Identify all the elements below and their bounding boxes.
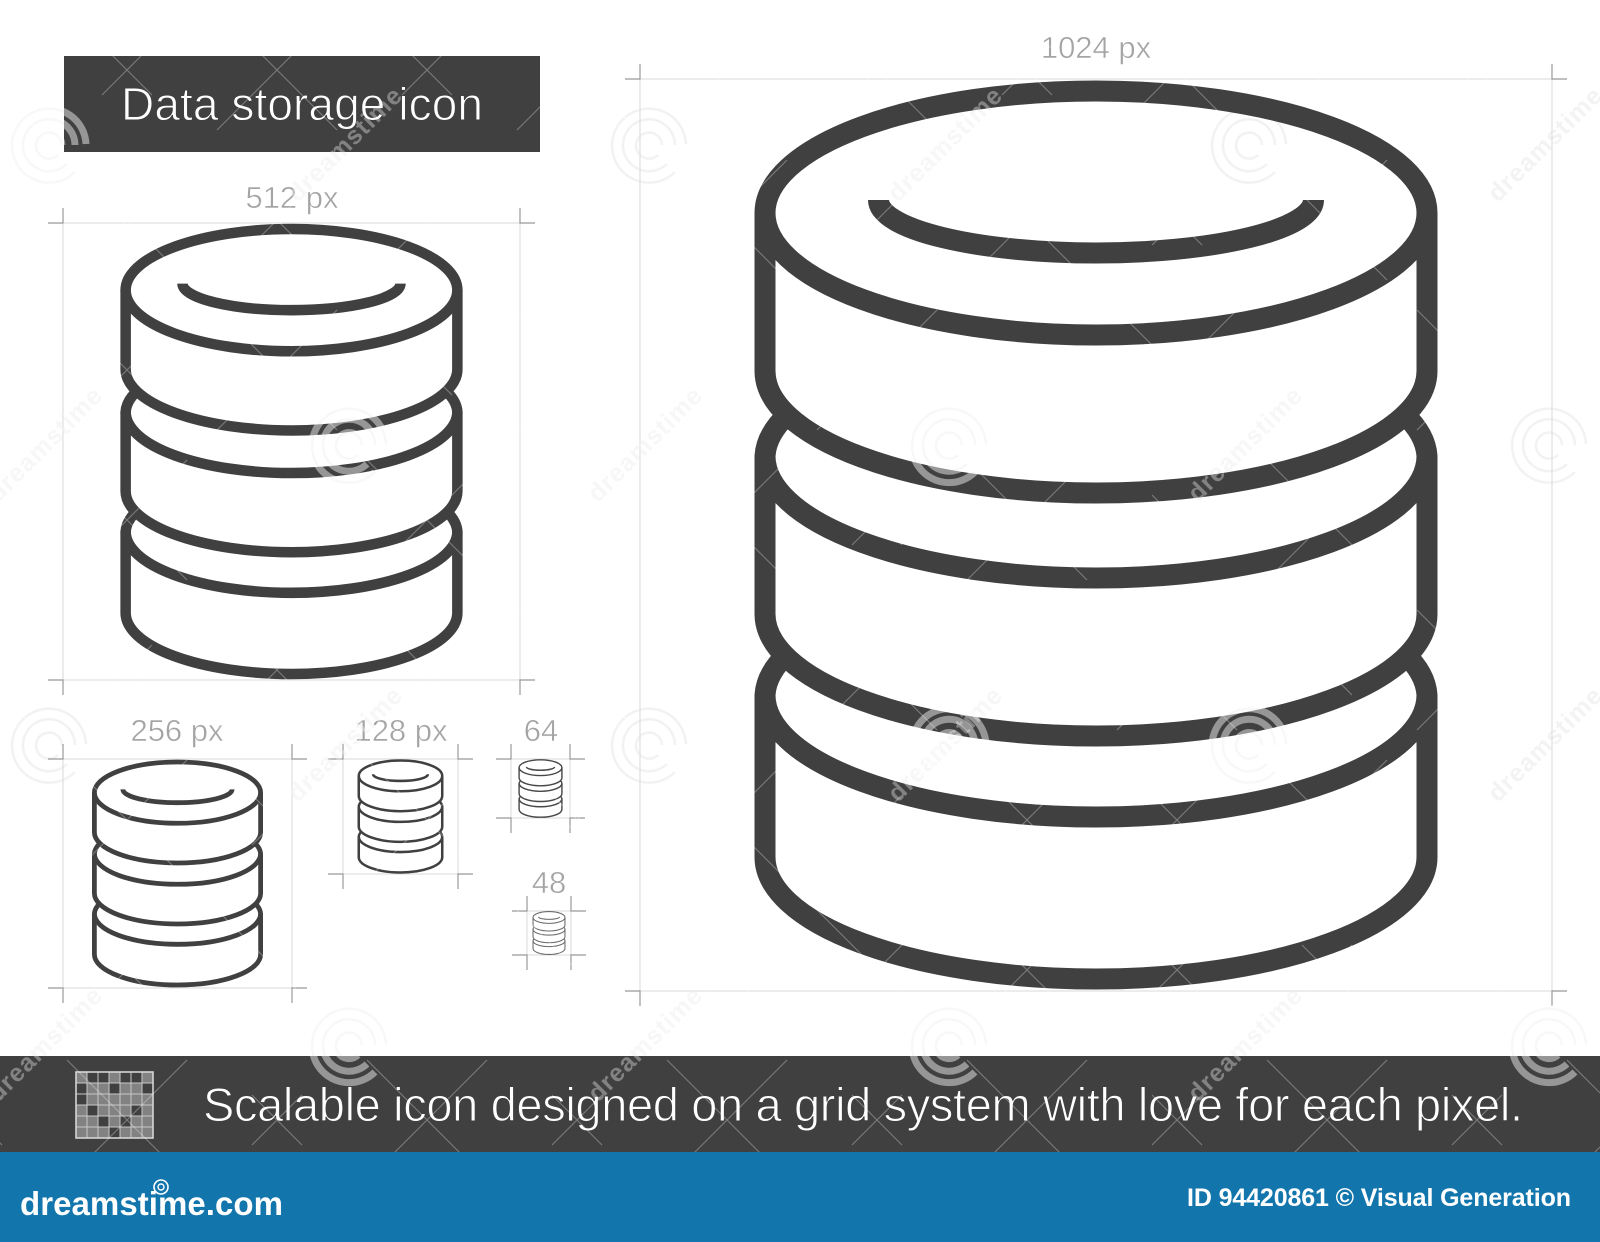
title banner xyxy=(64,56,540,152)
size panel: 512 px xyxy=(48,180,535,695)
watermark text, faint on white: dreamstime xyxy=(882,81,1008,207)
label: 64: 64 xyxy=(524,713,558,748)
icon: data storage 256 xyxy=(94,762,261,985)
watermark text, faint on white: dreamstime xyxy=(1182,381,1308,507)
label: 128 px: 128 px xyxy=(354,713,448,748)
label: 512 px: 512 px xyxy=(245,180,339,215)
watermark text, faint on white: dreamstime xyxy=(282,681,408,807)
size panel: 1024 px xyxy=(625,30,1567,1006)
watermark overlay on dark shapes: dreamstime xyxy=(582,381,708,507)
size panel: 128 px xyxy=(328,713,473,889)
icon: data storage 64 xyxy=(519,760,562,817)
watermark text, faint on white: dreamstime xyxy=(1182,981,1308,1107)
watermark overlay on dark shapes: dreamstime xyxy=(882,681,1008,807)
size panel: 48 px xyxy=(512,865,586,970)
icon: data storage 48 xyxy=(533,912,565,954)
watermark text, faint on white: dreamstime xyxy=(582,381,708,507)
image id and credit: ID 94420861 © Visual Generation xyxy=(1187,1184,1571,1212)
watermark overlay on dark shapes: dreamstime xyxy=(1182,381,1308,507)
watermark text, faint on white: dreamstime xyxy=(882,681,1008,807)
watermark overlay on dark shapes: dreamstime xyxy=(582,981,708,1107)
icon: data storage 128 xyxy=(359,761,442,872)
size panel: 256 px xyxy=(48,713,307,1003)
watermark text, faint on white: dreamstime xyxy=(582,981,708,1107)
watermark text, faint on white: dreamstime xyxy=(282,81,408,207)
watermark overlay on dark shapes: dreamstime xyxy=(1182,981,1308,1107)
label: 48: 48 xyxy=(532,865,566,900)
footer caption: Scalable icon designed on a grid system with love for each pixel. xyxy=(203,1078,1523,1131)
watermark overlay on dark shapes: dreamstime xyxy=(882,81,1008,207)
title banner: Data storage icon xyxy=(121,78,483,130)
size panel: 64 px xyxy=(496,713,585,833)
dark footer strip xyxy=(0,1056,1600,1152)
watermark overlay on dark shapes: dreamstime xyxy=(282,81,408,207)
icon: data storage 1024 xyxy=(765,91,1427,979)
watermark overlay on dark shapes: dreamstime xyxy=(282,681,408,807)
blue credit bar xyxy=(0,1152,1600,1242)
label: 1024 px: 1024 px xyxy=(1041,30,1152,65)
label: 256 px: 256 px xyxy=(130,713,224,748)
icon: data storage 512 xyxy=(126,229,457,674)
logo: dreamstime.com: dreamstime.com xyxy=(20,1185,283,1222)
icon: pixel grid xyxy=(76,1072,153,1138)
watermark spirals, faint on white xyxy=(12,109,1586,1083)
